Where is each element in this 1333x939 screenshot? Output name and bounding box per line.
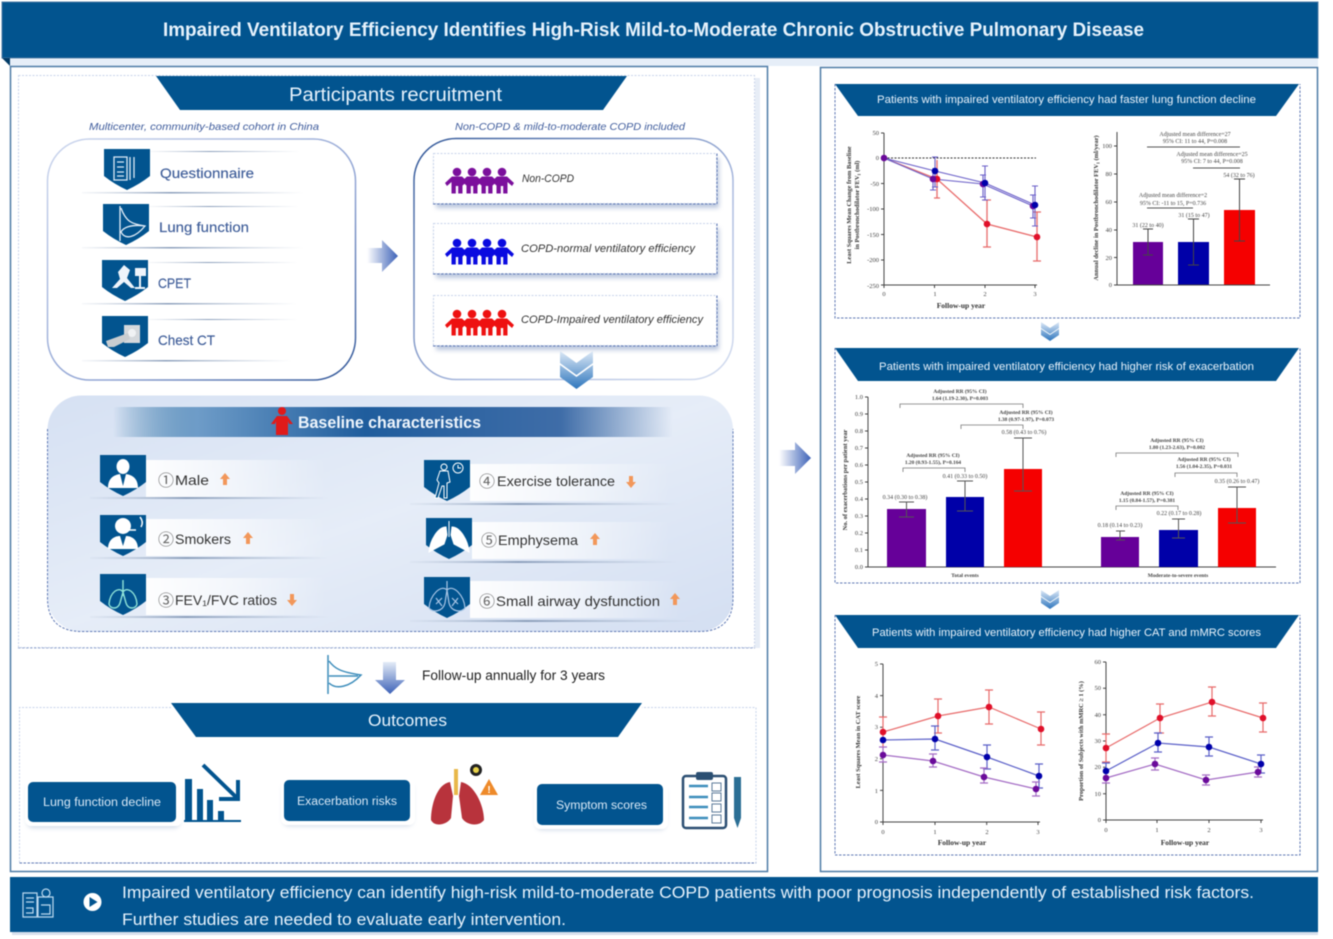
- line chart: mMRC proportion: 60: [1094, 659, 1101, 666]
- line chart: mMRC proportion: 10: [1094, 791, 1101, 798]
- item: male: [90, 455, 330, 499]
- heading: outcomes: Outcomes: [368, 711, 447, 730]
- arrow: double chevron to baseline: [560, 351, 593, 389]
- bars: total events: Total events: [951, 573, 979, 579]
- text: follow-up: Follow-up annually for 3 years: [422, 668, 605, 683]
- line chart: CAT score: [855, 661, 1045, 847]
- bar chart: annual decline: Annual decline in Postbronchodilator FEV₁ (ml/year): [1093, 135, 1100, 281]
- line chart: FEV1 change: 50: [872, 130, 879, 137]
- caption: multicenter cohort: Multicenter, community-based cohort in China: [89, 121, 319, 133]
- line chart: CAT score: Follow-up year: [938, 838, 987, 847]
- exam: questionnaire: [82, 149, 304, 194]
- bars: total events: Adjusted RR (95% CI): [906, 452, 960, 459]
- line chart: mMRC proportion: 1: [1155, 827, 1159, 834]
- line chart: CAT score: 2: [875, 756, 878, 763]
- item: small airway dysfunction: ⑥: [479, 593, 495, 611]
- line chart: CAT score: Least Squares Mean in CAT score: [855, 695, 862, 788]
- bar chart: annual decline: Adjusted mean difference=2: [1139, 192, 1207, 199]
- panel: outcomes: [20, 703, 756, 863]
- outcome: exacerbation risks: [281, 764, 498, 826]
- line chart: FEV1 change: -250: [867, 283, 879, 290]
- bar chart: exacerbations per patient year: 0.3: [855, 513, 863, 520]
- bars: moderate-to-severe events: 0.35 (0.26 to 0.47): [1215, 478, 1259, 485]
- line chart: CAT score: 0: [875, 819, 878, 826]
- item: FEV1/FVC ratios: [90, 574, 330, 618]
- bar chart: annual decline: 95% CI: -11 to 15, P=0.736: [1140, 201, 1206, 207]
- item: exercise tolerance: Exercise tolerance: [497, 473, 615, 489]
- line chart: CAT score: 4: [875, 693, 879, 700]
- bars: moderate-to-severe events: Moderate-to-severe events: [1148, 573, 1208, 579]
- bars: total events: 0.34 (0.30 to 0.38): [883, 494, 927, 501]
- bar chart: exacerbations per patient year: [842, 388, 1276, 579]
- icon: flow-volume curve: [328, 655, 361, 694]
- heading: exacerbation: [835, 348, 1299, 381]
- bars: total events: 1.20 (0.93-1.55), P=0.164: [905, 459, 961, 466]
- heading: outcomes: [171, 703, 642, 737]
- exam: chest CT: [82, 316, 298, 362]
- line chart: FEV1 change: 3: [1033, 291, 1037, 298]
- line chart: FEV1 change: in Postbronchodilator FEV₁ (ml): [854, 161, 861, 249]
- group: COPD normal ventilatory efficiency: COPD-normal ventilatory efficiency: [521, 243, 697, 255]
- bar chart: annual decline: 40: [1106, 227, 1112, 234]
- group: non-COPD: [433, 153, 719, 208]
- bar chart: annual decline: 54 (32 to 76): [1223, 172, 1255, 179]
- arrow: to groups: [367, 240, 398, 272]
- caption: included participants: Non-COPD & mild-to-moderate COPD included: [455, 121, 686, 133]
- line chart: mMRC proportion: 3: [1259, 827, 1263, 834]
- heading: baseline characteristics: [113, 407, 673, 437]
- bar chart: annual decline: 95% CI: 11 to 44, P=0.008: [1163, 139, 1227, 145]
- exam: lung function: Lung function: [159, 219, 249, 235]
- bar chart: annual decline: 0: [1109, 282, 1112, 289]
- item: emphysema: ⑤: [481, 532, 497, 550]
- line chart: FEV1 change: -150: [867, 232, 879, 239]
- title banner: [2, 2, 1318, 66]
- exam: questionnaire: Questionnaire: [160, 165, 254, 181]
- item: emphysema: Emphysema: [498, 532, 578, 548]
- line chart: FEV1 change: -100: [867, 206, 879, 213]
- line chart: mMRC proportion: 0: [1098, 817, 1101, 824]
- bar chart: exacerbations per patient year: 0.6: [855, 462, 864, 469]
- bar chart: annual decline: 100: [1102, 143, 1112, 150]
- line chart: mMRC proportion: 0: [1104, 827, 1108, 834]
- bars: total events: Adjusted RR (95% CI): [933, 388, 987, 395]
- exam: CPET: CPET: [158, 275, 191, 291]
- heading: CAT and mMRC: [835, 615, 1299, 648]
- conclusion banner: [10, 877, 1318, 935]
- line chart: CAT score: 1: [875, 788, 878, 795]
- heading: exacerbation: Patients with impaired ventilatory efficiency had higher risk of exacerbation: [879, 361, 1254, 373]
- outcome: exacerbation risks: Exacerbation risks: [297, 796, 397, 808]
- bar chart: exacerbations per patient year: 0.1: [855, 547, 863, 554]
- panel: examinations: [48, 139, 356, 380]
- item: exercise tolerance: [410, 460, 680, 505]
- exam: lung function: [82, 204, 304, 248]
- group: COPD impaired ventilatory efficiency: COPD-Impaired ventilatory efficiency: [521, 314, 705, 326]
- line chart: mMRC proportion: Follow-up year: [1161, 838, 1210, 847]
- outcome: symptom scores: [534, 772, 741, 830]
- bar chart: annual decline: 20: [1106, 255, 1112, 262]
- panel: symptom score results: [835, 615, 1300, 855]
- outcome: lung function decline: Lung function decline: [43, 797, 161, 809]
- line chart: mMRC proportion: 2: [1207, 827, 1211, 834]
- bar chart: annual decline: [1093, 131, 1270, 289]
- text: conclusion: Further studies are needed to evaluate early intervention.: [122, 910, 566, 929]
- line chart: mMRC proportion: 20: [1094, 764, 1101, 771]
- line chart: FEV1 change: Follow-up year: [937, 301, 986, 310]
- bar chart: exacerbations per patient year: 0.5: [855, 479, 863, 486]
- arrow: chevron 1: [1041, 322, 1059, 341]
- bars: moderate-to-severe events: Adjusted RR (95% CI): [1120, 490, 1174, 497]
- icon: play button: [84, 893, 102, 911]
- line chart: FEV1 change: -50: [870, 181, 879, 188]
- bars: total events: [883, 388, 1054, 579]
- item: FEV1/FVC ratios: ③: [158, 592, 174, 610]
- line chart: FEV1 change: -200: [867, 257, 879, 264]
- bar chart: annual decline: 31 (15 to 47): [1178, 212, 1210, 219]
- item: small airway dysfunction: Small airway dysfunction: [496, 593, 660, 609]
- bars: moderate-to-severe events: Adjusted RR (95% CI): [1150, 437, 1204, 444]
- text: conclusion: [122, 883, 1254, 929]
- exam: CPET: [82, 260, 298, 304]
- arrow: follow-up down: [375, 662, 405, 694]
- line chart: mMRC proportion: 50: [1094, 685, 1101, 692]
- line chart: mMRC proportion: 40: [1094, 712, 1101, 719]
- item: exercise tolerance: ④: [479, 473, 495, 491]
- arrow: design to results: [779, 442, 811, 474]
- panel: baseline characteristics: [48, 396, 733, 632]
- group: COPD impaired ventilatory efficiency: [433, 295, 719, 350]
- line chart: mMRC proportion: 30: [1094, 738, 1101, 745]
- arrow: chevron 2: [1041, 590, 1059, 609]
- heading: baseline characteristics: Baseline characteristics: [298, 413, 481, 432]
- heading: participants recruitment: Participants recruitment: [289, 85, 503, 106]
- item: FEV1/FVC ratios: FEV₁/FVC ratios: [175, 592, 277, 608]
- bar chart: exacerbations per patient year: 0.8: [855, 428, 863, 435]
- panel: left study design: [10, 66, 768, 872]
- bar chart: annual decline: Adjusted mean difference=25: [1176, 151, 1248, 158]
- heading: CAT and mMRC: Patients with impaired ventilatory efficiency had higher CAT and mMRC scores: [872, 627, 1261, 639]
- item: male: Male: [175, 472, 209, 488]
- exam: chest CT: Chest CT: [158, 332, 215, 348]
- bars: moderate-to-severe events: Adjusted RR (95% CI): [1177, 456, 1231, 463]
- panel: lung function decline results: [835, 84, 1300, 318]
- line chart: FEV1 change: 1: [933, 291, 937, 298]
- item: emphysema: [410, 518, 680, 563]
- item: small airway dysfunction: [410, 577, 700, 622]
- bars: total events: 0.58 (0.43 to 0.76): [1002, 429, 1046, 436]
- bar chart: annual decline: 31 (22 to 40): [1132, 222, 1164, 229]
- panel: exacerbation results: [835, 348, 1300, 583]
- bar chart: exacerbations per patient year: No. of exacerbations per patient year: [842, 429, 849, 530]
- bar chart: annual decline: Adjusted mean difference=27: [1159, 131, 1231, 138]
- icon: book with lightbulb: [23, 889, 53, 917]
- bars: total events: 1.64 (1.19-2.30), P=0.003: [932, 395, 988, 402]
- item: smokers: ②: [158, 531, 174, 549]
- line chart: FEV1 change: 0: [882, 291, 886, 298]
- item: smokers: Smokers: [175, 531, 231, 547]
- line chart: FEV1 change: 2: [983, 291, 987, 298]
- line chart: mMRC proportion: [1078, 659, 1267, 847]
- line chart: FEV1 change: 0: [876, 155, 879, 162]
- line chart: FEV1 change: [846, 130, 1041, 310]
- bars: moderate-to-severe events: 1.80 (1.23-2.63), P=0.002: [1149, 444, 1205, 451]
- bar chart: exacerbations per patient year: 0.2: [855, 530, 863, 537]
- group: COPD normal ventilatory efficiency: [433, 223, 719, 278]
- line chart: FEV1 change: Least Squares Mean Change from Baseline: [846, 146, 853, 264]
- heading: lung function decline: Patients with impaired ventilatory efficiency had faster lung function decline: [877, 94, 1256, 106]
- outcome: lung function decline: [25, 765, 241, 828]
- bars: moderate-to-severe events: 1.15 (0.84-1.57), P=0.381: [1119, 497, 1175, 504]
- bar chart: annual decline: 60: [1106, 199, 1112, 206]
- bar chart: annual decline: 95% CI: 7 to 44, P=0.008: [1181, 159, 1243, 165]
- bars: total events: Adjusted RR (95% CI): [999, 409, 1053, 416]
- bar chart: exacerbations per patient year: 0.7: [855, 445, 864, 452]
- follow-up annually: [328, 655, 605, 694]
- bar chart: annual decline: 80: [1106, 171, 1112, 178]
- bars: moderate-to-severe events: 1.56 (1.04-2.35), P=0.031: [1176, 463, 1232, 470]
- outcome: symptom scores: Symptom scores: [556, 800, 647, 812]
- heading: participants recruitment: [156, 76, 627, 110]
- line chart: CAT score: 3: [875, 724, 878, 731]
- bars: total events: 1.38 (0.97-1.97), P=0.073: [998, 416, 1054, 423]
- group: non-COPD: Non-COPD: [522, 173, 574, 185]
- line chart: CAT score: 2: [985, 829, 989, 836]
- item: male: ①: [158, 472, 174, 490]
- bars: moderate-to-severe events: [1098, 437, 1259, 579]
- bars: moderate-to-severe events: 0.22 (0.17 to 0.28): [1157, 510, 1201, 517]
- panel: participant groups: [414, 138, 733, 380]
- line chart: CAT score: 0: [881, 829, 885, 836]
- line chart: CAT score: 1: [933, 829, 937, 836]
- heading: lung function decline: [835, 84, 1299, 116]
- bar chart: exacerbations per patient year: 0.9: [855, 411, 863, 418]
- line chart: CAT score: 3: [1036, 829, 1040, 836]
- bars: moderate-to-severe events: 0.18 (0.14 to 0.23): [1098, 522, 1142, 529]
- bar chart: exacerbations per patient year: 0.4: [855, 496, 864, 503]
- bars: total events: 0.41 (0.33 to 0.50): [943, 473, 987, 480]
- bar chart: exacerbations per patient year: 1.0: [855, 394, 863, 401]
- bar chart: exacerbations per patient year: 0.0: [855, 564, 863, 571]
- panel: right results: [820, 68, 1318, 872]
- line chart: CAT score: 5: [875, 661, 878, 668]
- outcome: exacerbation risks: !: [487, 785, 491, 796]
- title banner: Impaired Ventilatory Efficiency Identifies High-Risk Mild-to-Moderate Chronic Obstructive Pulmonary Disease: [163, 20, 1144, 41]
- line chart: mMRC proportion: Proportion of Subjects with mMRC ≥ 1 (%): [1078, 681, 1085, 801]
- text: conclusion: Impaired ventilatory efficiency can identify high-risk mild-to-moderate COPD patients with poor prognosis independently of established risk factors.: [122, 883, 1254, 902]
- item: smokers: [90, 515, 330, 559]
